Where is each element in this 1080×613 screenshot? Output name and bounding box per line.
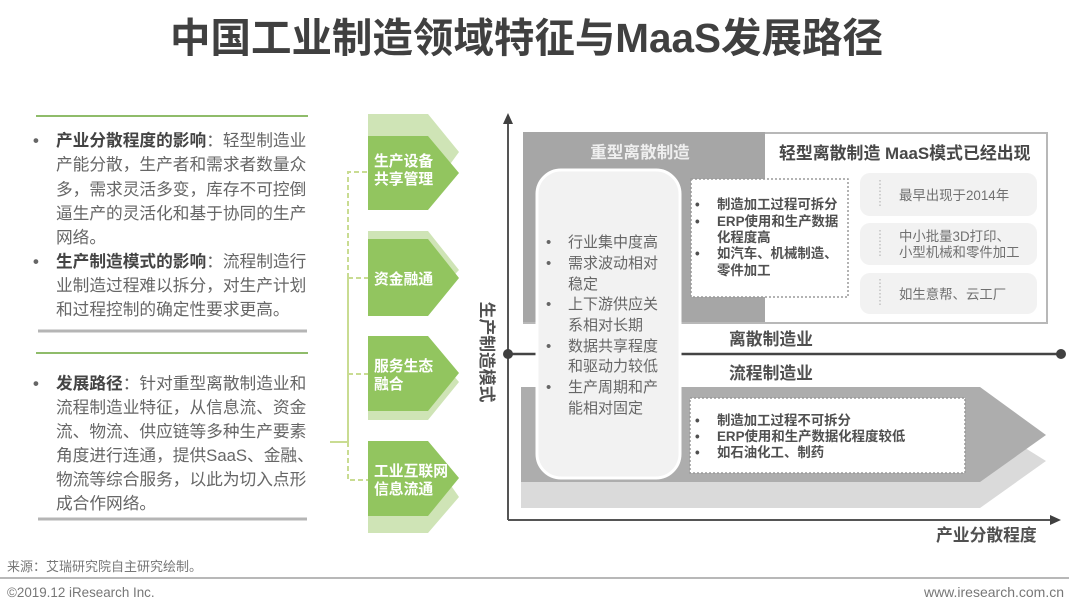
bottom arrows: process manufacturing bbox=[521, 387, 1046, 508]
copyright: ©2019.12 iResearch Inc. bbox=[7, 585, 155, 600]
heading: light discrete: 轻型离散制造 MaaS模式已经出现 bbox=[779, 143, 1031, 163]
dashed box: light discrete features: 制造加工过程可拆分 bbox=[717, 196, 838, 212]
heading: heavy discrete: 重型离散制造 bbox=[590, 142, 690, 162]
panel: development path text: 流、物流、供应链等多种生产要素 bbox=[56, 422, 306, 441]
dashed box: process manufacturing features: • bbox=[695, 413, 700, 428]
text block: production mode influence bbox=[33, 252, 306, 319]
chevron: service ecosystem: 服务生态 bbox=[374, 357, 433, 375]
text block: production mode influence: 生产制造模式的影响：流程制造行 bbox=[56, 252, 306, 271]
text block: production mode influence: 和过程控制的确定性要求更高。 bbox=[56, 300, 290, 319]
website: www.iresearch.com.cn bbox=[923, 584, 1064, 600]
central pill: heavy and process traits: 稳定 bbox=[568, 276, 598, 293]
central pill: heavy and process traits: • bbox=[546, 234, 551, 251]
chevron: financing: 资金融通 bbox=[374, 270, 433, 288]
central pill: heavy and process traits: 上下游供应关 bbox=[568, 295, 658, 313]
central pill: heavy and process traits: 生产周期和产 bbox=[568, 379, 658, 396]
source note: 来源：艾瑞研究院自主研究绘制。 bbox=[7, 559, 202, 574]
card: examples: 如生意帮、云工厂 bbox=[899, 286, 1006, 302]
central pill: heavy and process traits: • bbox=[546, 255, 551, 272]
card: application scope: 中小批量3D打印、 bbox=[899, 228, 1010, 244]
central pill: heavy and process traits: 系相对长期 bbox=[568, 317, 643, 334]
card: earliest appearance bbox=[860, 173, 1037, 216]
dashed box: process manufacturing features: • bbox=[695, 445, 700, 460]
central pill: heavy and process traits: 行业集中度高 bbox=[568, 234, 658, 251]
dashed box: light discrete features: • bbox=[695, 214, 700, 229]
dashed box: process manufacturing features: 制造加工过程不可拆分 bbox=[717, 412, 852, 428]
card: examples bbox=[860, 273, 1037, 314]
chevron: service ecosystem: 融合 bbox=[374, 375, 404, 393]
chevron: equipment sharing bbox=[368, 114, 459, 210]
chevron: service ecosystem bbox=[368, 336, 459, 420]
chevron: equipment sharing: 共享管理 bbox=[374, 170, 433, 188]
text block: dispersion influence: 网络。 bbox=[56, 228, 106, 247]
central pill: heavy and process traits: • bbox=[546, 296, 551, 313]
heavy discrete background bbox=[523, 132, 765, 322]
dashed box: light discrete features: ERP使用和生产数据 bbox=[717, 213, 838, 229]
text block: dispersion influence bbox=[33, 131, 307, 247]
panel: development path text: 物流等综合服务，以此为切入点形 bbox=[56, 470, 307, 489]
panel: industry influence text bbox=[33, 116, 308, 331]
central pill: heavy and process traits: 需求波动相对 bbox=[568, 255, 658, 272]
central pill: heavy and process traits: 和驱动力较低 bbox=[568, 357, 658, 375]
text block: dispersion influence: 产业分散程度的影响：轻型制造业 bbox=[56, 131, 306, 150]
text block: production mode influence: 业制造过程难以拆分，对生产计划 bbox=[56, 276, 306, 295]
top panel: discrete manufacturing bbox=[523, 132, 1047, 323]
panel: development path text: 流程制造业特征，从信息流、资金 bbox=[56, 398, 307, 417]
chevron: equipment sharing: 生产设备 bbox=[374, 152, 433, 170]
dashed box: light discrete features: 如汽车、机械制造、 bbox=[717, 245, 838, 261]
title: 中国工业制造领域特征与MaaS发展路径 bbox=[170, 15, 883, 61]
text block: dispersion influence: 多，需求灵活多变，库存不可控倒 bbox=[56, 180, 306, 199]
dashed box: light discrete features: • bbox=[695, 197, 700, 212]
footer rule bbox=[0, 577, 1069, 579]
label: discrete manufacturing: 离散制造业 bbox=[729, 329, 813, 349]
text block: dispersion influence: 产能分散，生产者和需求者数量众 bbox=[56, 155, 307, 174]
panel: development path text: 成合作网络。 bbox=[56, 494, 156, 513]
card: earliest appearance: 最早出现于2014年 bbox=[899, 188, 1009, 203]
text block: production mode influence: • bbox=[33, 252, 39, 271]
dashed box: light discrete features: • bbox=[695, 246, 700, 261]
chevron: industrial internet: 信息流通 bbox=[374, 480, 433, 498]
dashed box: light discrete features: 化程度高 bbox=[717, 229, 771, 245]
card: application scope: 小型机械和零件加工 bbox=[899, 245, 1020, 260]
central pill: heavy and process traits: • bbox=[546, 338, 551, 355]
chevron: industrial internet bbox=[368, 441, 459, 533]
central pill: heavy and process traits bbox=[537, 170, 680, 478]
dashed box: process manufacturing features: ERP使用和生产数据化程度较低 bbox=[717, 428, 906, 444]
panel: development path text: 发展路径：针对重型离散制造业和 bbox=[56, 373, 306, 393]
x axis label: 产业分散程度 bbox=[936, 526, 1037, 545]
dashed box: process manufacturing features bbox=[690, 398, 965, 473]
y axis label: 生产制造模式 bbox=[477, 302, 496, 403]
dashed box: light discrete features bbox=[691, 179, 848, 297]
text block: dispersion influence: 逼生产的灵活化和基于协同的生产 bbox=[56, 204, 306, 223]
chevron: industrial internet: 工业互联网 bbox=[374, 463, 448, 480]
chevron: financing bbox=[368, 231, 459, 316]
label: process manufacturing: 流程制造业 bbox=[729, 364, 813, 383]
central pill: heavy and process traits: • bbox=[546, 379, 551, 396]
connector lines bbox=[330, 172, 368, 480]
dashed box: process manufacturing features: 如石油化工、制药 bbox=[717, 444, 824, 460]
panel: development path text: • bbox=[33, 374, 39, 393]
central pill: heavy and process traits: 数据共享程度 bbox=[568, 338, 658, 355]
panel: development path text: 角度进行连通，提供SaaS、金融、 bbox=[56, 446, 314, 465]
central pill: heavy and process traits: 能相对固定 bbox=[568, 400, 643, 417]
panel: development path text bbox=[33, 353, 314, 519]
chart axes bbox=[503, 113, 1066, 525]
card: application scope bbox=[860, 223, 1037, 265]
text block: dispersion influence: • bbox=[33, 131, 39, 150]
dashed box: light discrete features: 零件加工 bbox=[717, 263, 771, 278]
dashed box: process manufacturing features: • bbox=[695, 429, 700, 444]
